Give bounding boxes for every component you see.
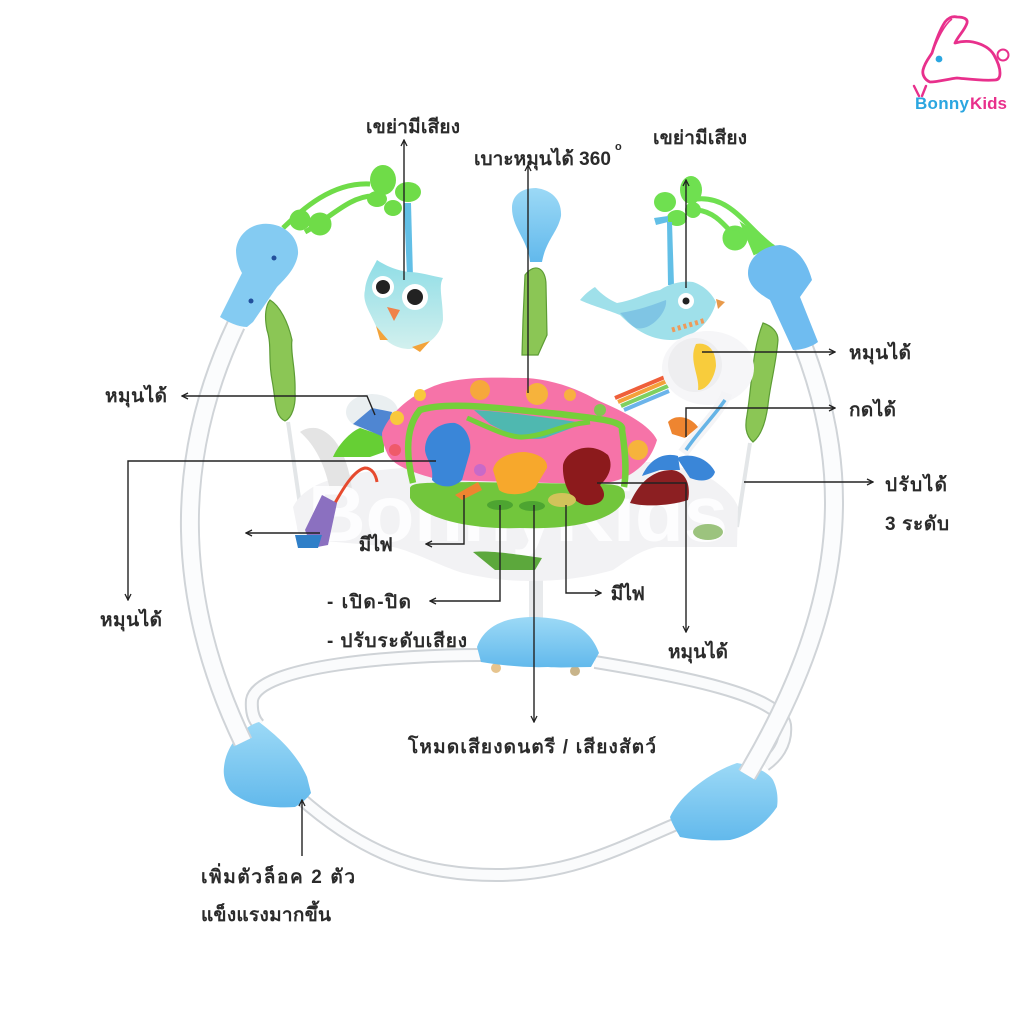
hanging ribbons xyxy=(404,203,674,285)
blue dome with red base xyxy=(630,455,715,505)
jumper frame: left and right poles xyxy=(190,325,834,775)
watermark rabbit and text xyxy=(300,428,728,558)
callout labels: มีไฟ xyxy=(611,582,645,605)
callout labels: - ปรับระดับเสียง xyxy=(327,630,467,652)
green toy arm right xyxy=(654,176,770,252)
callout labels: โหมดเสียงดนตรี / เสียงสัตว์ xyxy=(407,735,656,758)
logo: BonnyKids xyxy=(914,17,1008,113)
lever toy: purple and blue animal xyxy=(295,468,377,548)
callout labels: - เปิด-ปิด xyxy=(327,592,411,613)
blue centre connector xyxy=(477,617,599,676)
callout labels: o xyxy=(615,141,622,153)
callout labels: มีไฟ xyxy=(359,533,393,556)
strap struts xyxy=(288,422,750,527)
bird toy xyxy=(580,282,725,340)
callout labels: หมุนได้ xyxy=(668,640,728,664)
callout labels: เขย่ามีเสียง xyxy=(366,116,460,138)
blue foot left xyxy=(224,722,311,807)
white main tray xyxy=(293,462,738,581)
callout labels: แข็งแรงมากขึ้น xyxy=(201,900,331,926)
red squirrel toy xyxy=(563,448,611,505)
tray sticker right xyxy=(693,524,723,540)
watermark rabbit and text: BonnyKids xyxy=(308,469,728,558)
green toy tray with arch xyxy=(408,406,625,528)
callout labels: หมุนได้ xyxy=(100,608,162,632)
logo: BonnyKids: Kids xyxy=(970,94,1007,113)
callout labels xyxy=(100,116,949,926)
callout labels: 3 ระดับ xyxy=(885,514,949,535)
owl toy xyxy=(364,260,443,352)
tray buttons xyxy=(487,493,576,511)
jumper frame: base ring xyxy=(252,655,785,875)
pink seat cushion xyxy=(382,378,657,484)
logo: BonnyKids: Bonny xyxy=(915,94,970,113)
green fabric straps xyxy=(266,268,778,442)
callout labels: ปรับได้ xyxy=(885,473,947,496)
callout arrows xyxy=(128,140,873,856)
tiger toy xyxy=(668,417,698,438)
callout labels: หมุนได้ xyxy=(105,384,167,408)
left spin bubble toy xyxy=(333,394,398,457)
elephant toy xyxy=(425,423,470,486)
callout labels: เบาะหมุนได้ 360 xyxy=(474,147,611,171)
orange button xyxy=(455,482,482,500)
blue foot right xyxy=(670,763,778,840)
callout labels: เพิ่มตัวล็อค 2 ตัว xyxy=(201,863,355,888)
green toy arm left xyxy=(283,165,421,233)
callout labels: เขย่ามีเสียง xyxy=(653,127,747,149)
centre support pole xyxy=(529,570,543,625)
sun spinner toy xyxy=(662,331,754,453)
callout labels: กดได้ xyxy=(849,398,896,421)
rainbow slide xyxy=(615,377,669,410)
tray sticker xyxy=(473,552,542,570)
blue hubs on top of poles xyxy=(220,188,818,350)
callout labels: หมุนได้ xyxy=(849,341,911,365)
orange bird toy xyxy=(493,452,547,494)
